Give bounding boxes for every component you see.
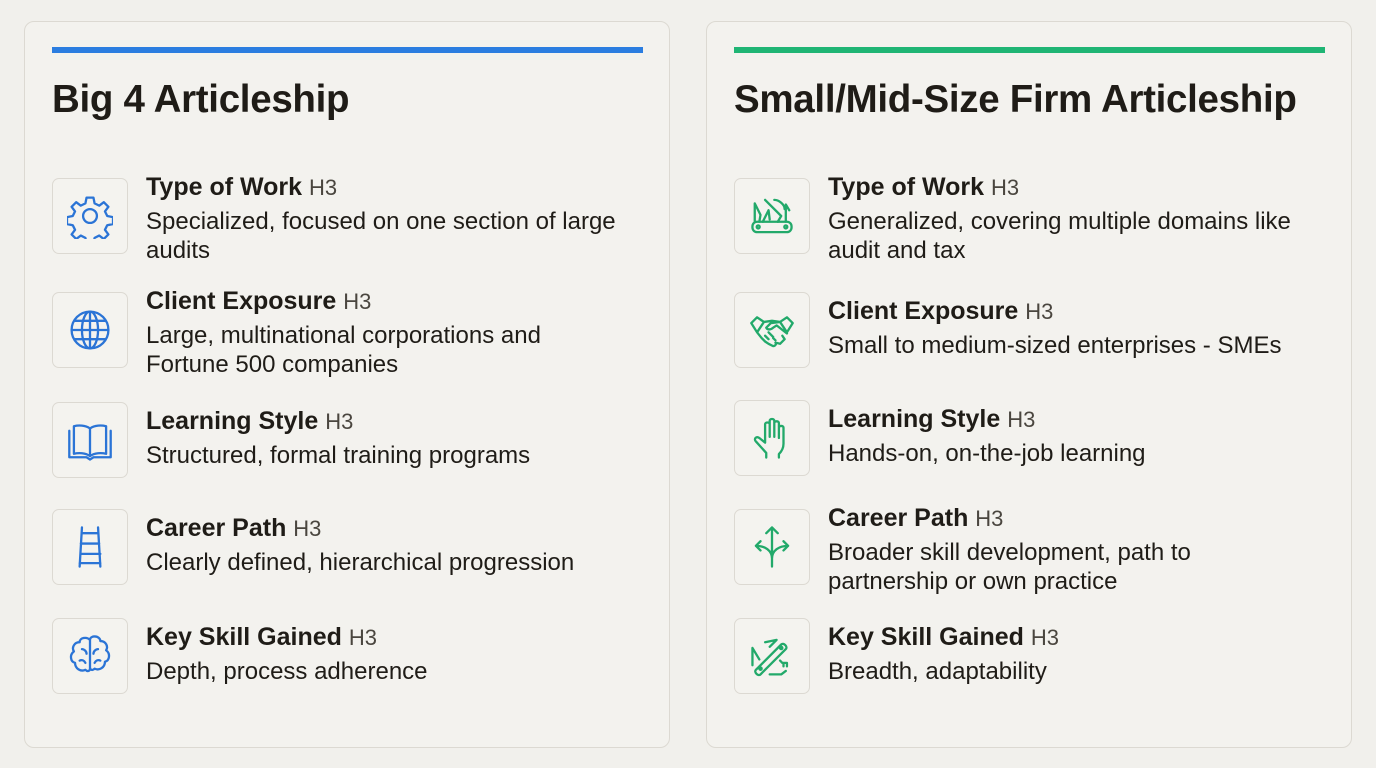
text [146, 514, 574, 576]
icon: ladder [52, 509, 128, 585]
text: Specialized, focused on one section of large audits [146, 208, 616, 264]
text: Depth, process adherence [146, 658, 428, 685]
text: Key Skill Gained H3 [146, 623, 377, 651]
accent bar green [734, 47, 1325, 53]
icon: branching arrows [734, 509, 810, 585]
title: Big 4 Articleship: Big 4 Articleship [52, 78, 349, 121]
text [146, 623, 428, 685]
text: Broader skill development, path to partnership or own practice [828, 539, 1191, 595]
text [828, 173, 1291, 264]
icon: brain [52, 618, 128, 694]
icon: book [52, 402, 128, 478]
icon: handshake [734, 292, 810, 368]
title: Small/Mid-Size Firm Articleship: Small/Mid-Size Firm Articleship [734, 78, 1297, 121]
text [828, 504, 1191, 595]
row: type of work [52, 173, 616, 264]
text: Career Path H3 [828, 504, 1003, 532]
icon: gear [52, 178, 128, 254]
text [828, 623, 1059, 685]
text: Clearly defined, hierarchical progression [146, 549, 574, 576]
text: Large, multinational corporations and Fortune 500 companies [146, 322, 541, 378]
accent bar blue [52, 47, 643, 53]
text: Career Path H3 [146, 514, 321, 542]
text [146, 287, 541, 378]
row: type of work [734, 173, 1291, 264]
panel: Small/Mid-Size [706, 21, 1352, 748]
text: Breadth, adaptability [828, 658, 1047, 685]
icon: hand [734, 400, 810, 476]
text: Generalized, covering multiple domains like audit and tax [828, 208, 1291, 264]
icon: multitool [734, 178, 810, 254]
text: Small to medium-sized enterprises - SMEs [828, 332, 1281, 359]
row: learning style [52, 402, 530, 478]
row: career path [734, 504, 1191, 595]
row: client exposure [734, 292, 1281, 368]
row: client exposure [52, 287, 541, 378]
text [146, 407, 530, 469]
text [828, 405, 1146, 467]
text: Learning Style H3 [828, 405, 1035, 433]
text: Hands-on, on-the-job learning [828, 440, 1146, 467]
text: Client Exposure H3 [146, 287, 371, 315]
text [146, 173, 616, 264]
icon: globe [52, 292, 128, 368]
text: Structured, formal training programs [146, 442, 530, 469]
text: Client Exposure H3 [828, 297, 1053, 325]
row: learning style [734, 400, 1146, 476]
row: key skill [52, 618, 428, 694]
row: career path [52, 509, 574, 585]
row: key skill [734, 618, 1059, 694]
text: Type of Work H3 [146, 173, 337, 201]
text: Key Skill Gained H3 [828, 623, 1059, 651]
text: Learning Style H3 [146, 407, 353, 435]
icon: pocket knife [734, 618, 810, 694]
panel: Big 4 [24, 21, 670, 748]
text: Type of Work H3 [828, 173, 1019, 201]
text [828, 297, 1281, 359]
